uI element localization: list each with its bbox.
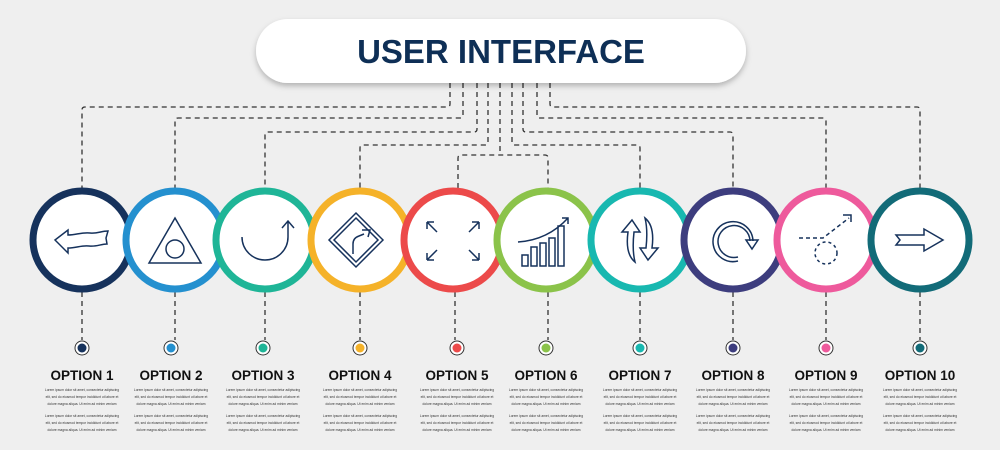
option 1: dolore magna aliqua. Ut enim ad minim veniam: [48, 402, 117, 406]
option 7: Lorem ipsum dolor sit amet, consectetur adipiscing: [603, 388, 677, 392]
option 5: dolore magna aliqua. Ut enim ad minim veniam: [423, 428, 492, 432]
option 9: elit, sed do eiusmod tempor incididunt ut labore et: [790, 395, 862, 399]
option 1: elit, sed do eiusmod tempor incididunt ut labore et: [46, 421, 118, 425]
option 5: [404, 191, 502, 432]
option 1: Lorem ipsum dolor sit amet, consectetur adipiscing: [45, 414, 119, 418]
option 10: OPTION 10: [885, 368, 955, 383]
option 6: OPTION 6: [514, 368, 578, 383]
icon: triangle circle: [149, 218, 201, 263]
option 4: Lorem ipsum dolor sit amet, consectetur adipiscing: [323, 388, 397, 392]
option 2: Lorem ipsum dolor sit amet, consectetur adipiscing: [134, 414, 208, 418]
option 3: dolore magna aliqua. Ut enim ad minim veniam: [229, 402, 298, 406]
option 10: dolore magna aliqua. Ut enim ad minim veniam: [886, 402, 955, 406]
option 9: Lorem ipsum dolor sit amet, consectetur adipiscing: [789, 388, 863, 392]
option 6: elit, sed do eiusmod tempor incididunt ut labore et: [510, 395, 582, 399]
title: [256, 19, 746, 83]
option 2: [126, 191, 224, 432]
option 8: elit, sed do eiusmod tempor incididunt ut labore et: [697, 421, 769, 425]
option 2: dolore magna aliqua. Ut enim ad minim veniam: [137, 428, 206, 432]
option 9: [777, 191, 875, 432]
option 8: [684, 191, 782, 432]
option 9: Lorem ipsum dolor sit amet, consectetur adipiscing: [789, 414, 863, 418]
option 10: elit, sed do eiusmod tempor incididunt ut labore et: [884, 395, 956, 399]
option 2: elit, sed do eiusmod tempor incididunt ut labore et: [135, 395, 207, 399]
title: USER INTERFACE: [357, 33, 645, 70]
option 4: elit, sed do eiusmod tempor incididunt ut labore et: [324, 395, 396, 399]
icon: road sign: [329, 213, 383, 267]
option 8: Lorem ipsum dolor sit amet, consectetur adipiscing: [696, 388, 770, 392]
option 3: elit, sed do eiusmod tempor incididunt ut labore et: [227, 395, 299, 399]
option 5: dolore magna aliqua. Ut enim ad minim veniam: [423, 402, 492, 406]
option 10: Lorem ipsum dolor sit amet, consectetur adipiscing: [883, 414, 957, 418]
option 4: elit, sed do eiusmod tempor incididunt ut labore et: [324, 421, 396, 425]
option 1: Lorem ipsum dolor sit amet, consectetur adipiscing: [45, 388, 119, 392]
option 7: OPTION 7: [608, 368, 672, 383]
option 10: dolore magna aliqua. Ut enim ad minim veniam: [886, 428, 955, 432]
connectors: [82, 83, 920, 188]
option 4: dolore magna aliqua. Ut enim ad minim veniam: [326, 428, 395, 432]
option 8: dolore magna aliqua. Ut enim ad minim veniam: [699, 402, 768, 406]
option 1: dolore magna aliqua. Ut enim ad minim veniam: [48, 428, 117, 432]
option 6: dolore magna aliqua. Ut enim ad minim veniam: [512, 428, 581, 432]
option 2: Lorem ipsum dolor sit amet, consectetur adipiscing: [134, 388, 208, 392]
option 7: dolore magna aliqua. Ut enim ad minim veniam: [606, 428, 675, 432]
option 3: Lorem ipsum dolor sit amet, consectetur adipiscing: [226, 388, 300, 392]
option 8: dolore magna aliqua. Ut enim ad minim veniam: [699, 428, 768, 432]
option 9: dolore magna aliqua. Ut enim ad minim veniam: [792, 428, 861, 432]
option 8: Lorem ipsum dolor sit amet, consectetur adipiscing: [696, 414, 770, 418]
icon: wavy arrow left: [55, 230, 108, 253]
option 3: dolore magna aliqua. Ut enim ad minim veniam: [229, 428, 298, 432]
option 2: elit, sed do eiusmod tempor incididunt ut labore et: [135, 421, 207, 425]
option 5: Lorem ipsum dolor sit amet, consectetur adipiscing: [420, 388, 494, 392]
icon: expand arrows: [427, 222, 479, 260]
option 6: dolore magna aliqua. Ut enim ad minim veniam: [512, 402, 581, 406]
icon: rotate arrow: [713, 222, 758, 262]
option 7: elit, sed do eiusmod tempor incididunt ut labore et: [604, 421, 676, 425]
option 6: Lorem ipsum dolor sit amet, consectetur adipiscing: [509, 414, 583, 418]
option 1: elit, sed do eiusmod tempor incididunt ut labore et: [46, 395, 118, 399]
option 3: elit, sed do eiusmod tempor incididunt ut labore et: [227, 421, 299, 425]
option 4: OPTION 4: [328, 368, 392, 383]
option 10: Lorem ipsum dolor sit amet, consectetur adipiscing: [883, 388, 957, 392]
option 4: Lorem ipsum dolor sit amet, consectetur adipiscing: [323, 414, 397, 418]
icon: dashed path: [799, 215, 851, 264]
option 7: [591, 191, 689, 432]
option 8: elit, sed do eiusmod tempor incididunt ut labore et: [697, 395, 769, 399]
option 1: [33, 191, 131, 432]
option 8: OPTION 8: [701, 368, 765, 383]
option 10: elit, sed do eiusmod tempor incididunt ut labore et: [884, 421, 956, 425]
option 2: OPTION 2: [139, 368, 203, 383]
option 5: Lorem ipsum dolor sit amet, consectetur adipiscing: [420, 414, 494, 418]
option 6: elit, sed do eiusmod tempor incididunt ut labore et: [510, 421, 582, 425]
option 6: [497, 191, 595, 432]
option 10: [871, 191, 969, 432]
option 7: elit, sed do eiusmod tempor incididunt ut labore et: [604, 395, 676, 399]
option 5: OPTION 5: [425, 368, 489, 383]
icon: u-turn arrow: [242, 221, 294, 260]
option 2: dolore magna aliqua. Ut enim ad minim veniam: [137, 402, 206, 406]
option 7: Lorem ipsum dolor sit amet, consectetur adipiscing: [603, 414, 677, 418]
option 3: Lorem ipsum dolor sit amet, consectetur adipiscing: [226, 414, 300, 418]
icon: sync arrows: [622, 218, 658, 262]
option 9: elit, sed do eiusmod tempor incididunt ut labore et: [790, 421, 862, 425]
option 4: [311, 191, 409, 432]
option 9: dolore magna aliqua. Ut enim ad minim veniam: [792, 402, 861, 406]
option 6: Lorem ipsum dolor sit amet, consectetur adipiscing: [509, 388, 583, 392]
option 1: OPTION 1: [50, 368, 114, 383]
option 3: [216, 191, 314, 432]
option 7: dolore magna aliqua. Ut enim ad minim veniam: [606, 402, 675, 406]
option 5: elit, sed do eiusmod tempor incididunt ut labore et: [421, 421, 493, 425]
icon: growth chart: [518, 218, 568, 266]
icon: right arrow: [896, 229, 943, 251]
option 9: OPTION 9: [794, 368, 858, 383]
option 4: dolore magna aliqua. Ut enim ad minim veniam: [326, 402, 395, 406]
option 5: elit, sed do eiusmod tempor incididunt ut labore et: [421, 395, 493, 399]
option 3: OPTION 3: [231, 368, 295, 383]
